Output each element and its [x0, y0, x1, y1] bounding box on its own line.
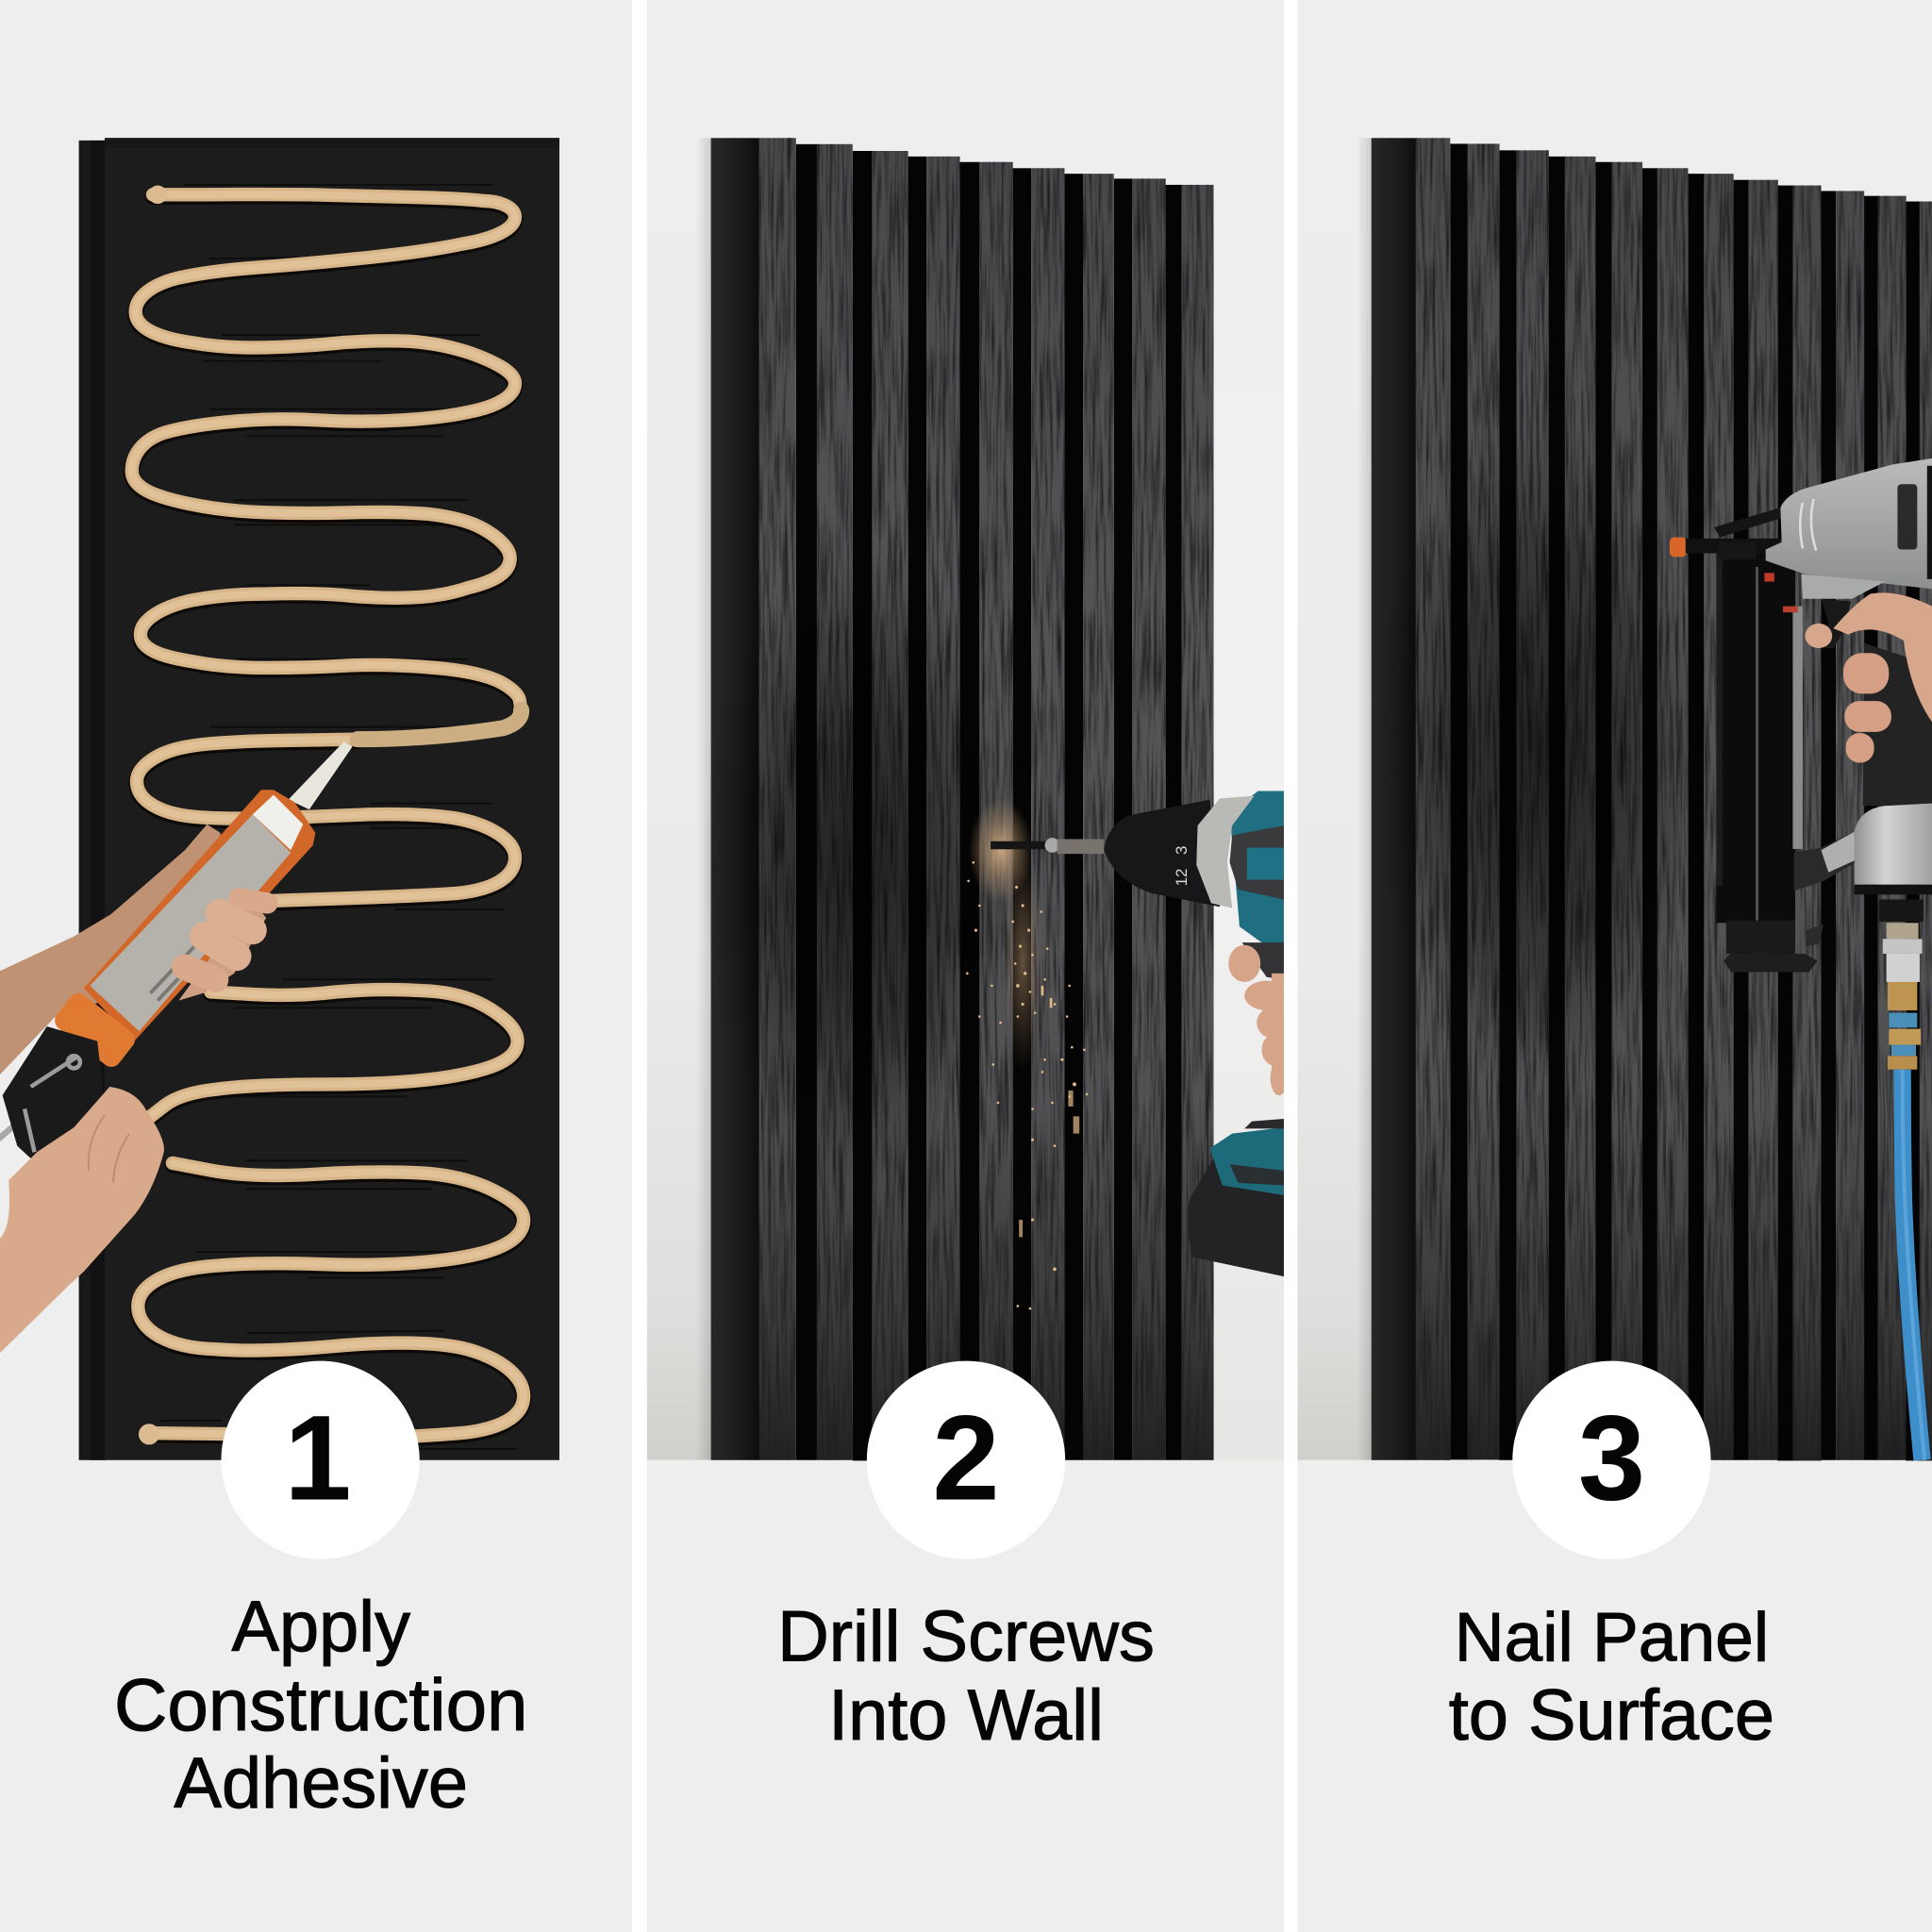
head window: [1897, 484, 1917, 550]
upper hand fingers: [178, 898, 267, 1001]
caption 2: [777, 1597, 1155, 1756]
wall right of slats: [1214, 0, 1284, 1460]
step badge 3: [1512, 1361, 1711, 1559]
chrome detail: [25, 1056, 80, 1152]
step badge 2: [867, 1361, 1065, 1559]
caption 2: Drill Screws: [777, 1597, 1155, 1677]
nose: [1686, 539, 1782, 553]
screw: [991, 842, 1047, 848]
wall: [647, 0, 1284, 1460]
rough bead being laid: [358, 709, 522, 740]
nose bracket: [1719, 542, 1756, 559]
trigger plate: [1802, 575, 1885, 599]
orange frame: [84, 790, 315, 1041]
panel: step 1 adhesive: [0, 0, 632, 1932]
magazine latch: [1807, 924, 1824, 946]
bit holder: [1045, 838, 1059, 853]
red marker lower: [1783, 607, 1798, 612]
caption 3: [1449, 1600, 1774, 1756]
head edge: [1927, 466, 1932, 579]
trigger: [1821, 599, 1851, 648]
coupler: [1879, 899, 1924, 1070]
end side: [711, 138, 760, 1460]
caption 3: to Surface: [1449, 1675, 1774, 1756]
lower hand: [0, 1087, 164, 1353]
caption zone: [647, 1460, 1284, 1932]
adhesive bead: [132, 186, 524, 1444]
cartridge white cap: [253, 794, 303, 850]
step badge 1: 1: [284, 1391, 352, 1526]
head ribs: [1800, 499, 1816, 551]
slat recesses: [796, 144, 1182, 1460]
magazine foot: [1724, 954, 1818, 973]
chuck speed numbers: 3: [1173, 846, 1191, 855]
black backing board: [79, 138, 559, 1460]
black ring: [1855, 885, 1932, 894]
grip: [1863, 643, 1932, 806]
nozzle: [289, 741, 353, 809]
hand: [1805, 592, 1932, 762]
magazine end block: [1726, 921, 1795, 954]
caption 1: Construction: [114, 1663, 527, 1746]
red marker: [1764, 573, 1774, 581]
magazine: [1716, 553, 1803, 924]
caulking gun and tube: [0, 741, 353, 1160]
orange tip: [1670, 537, 1687, 557]
panel: step 2 drill: [647, 0, 1291, 1932]
slat faces: [1416, 138, 1932, 1460]
silver base: [1855, 804, 1932, 885]
shadow on slats: [1374, 419, 1707, 1084]
caption 1: [114, 1587, 527, 1824]
drill hand: [1228, 945, 1291, 1095]
gun mechanism: [3, 1026, 104, 1160]
caption 3: Nail Panel: [1455, 1600, 1769, 1676]
bead end knob: [139, 1424, 159, 1444]
slat wall: [702, 138, 1214, 1460]
air hose: [1903, 1070, 1924, 1460]
dark housing panel: [1230, 825, 1284, 899]
teal inset: [1247, 848, 1284, 880]
upper link: [1714, 508, 1783, 537]
sawdust: [966, 798, 1088, 1309]
caption 1: Apply: [231, 1587, 410, 1667]
nail gun: [1670, 458, 1932, 1460]
caption 1: Adhesive: [174, 1743, 468, 1824]
bead start knob: [148, 186, 167, 204]
drill: [991, 791, 1291, 1276]
silver head: [1766, 458, 1932, 589]
drill shaft: [1058, 839, 1104, 854]
grey cartridge: [90, 814, 291, 1031]
slat wall: [1372, 138, 1932, 1460]
grey collar: [1196, 796, 1255, 908]
end side: [1372, 138, 1417, 1460]
wall: [1297, 0, 1932, 1460]
slat faces: [759, 138, 1214, 1460]
step badge 3: 3: [1578, 1391, 1645, 1526]
rod: [0, 1111, 31, 1140]
orange end cap: [51, 990, 139, 1071]
step badge 1: [221, 1361, 420, 1559]
caption zone: [1297, 1460, 1932, 1932]
grip: [1242, 942, 1284, 979]
arm behind gun: [0, 824, 221, 1074]
front link: [1794, 832, 1856, 891]
wall shadow: [696, 138, 711, 1460]
gutter 2: [1284, 0, 1297, 1932]
chuck body: [1104, 800, 1220, 907]
gutter 1: [632, 0, 647, 1932]
teal housing: [1230, 791, 1284, 958]
battery: [1188, 1119, 1284, 1276]
panel: step 3 nail gun: [1297, 0, 1932, 1932]
wall shadow: [1357, 138, 1372, 1460]
chuck speed numbers: 12: [1173, 869, 1191, 886]
link highlight: [1821, 832, 1856, 873]
cartridge label print: [150, 924, 216, 1001]
chuck speed numbers: [1173, 846, 1191, 886]
step badge 2: 2: [932, 1391, 1000, 1526]
slat recesses: [1450, 143, 1920, 1460]
shadow on slats: [702, 542, 1010, 1183]
panel background: [0, 0, 632, 1932]
caption 2: Into Wall: [828, 1675, 1104, 1756]
